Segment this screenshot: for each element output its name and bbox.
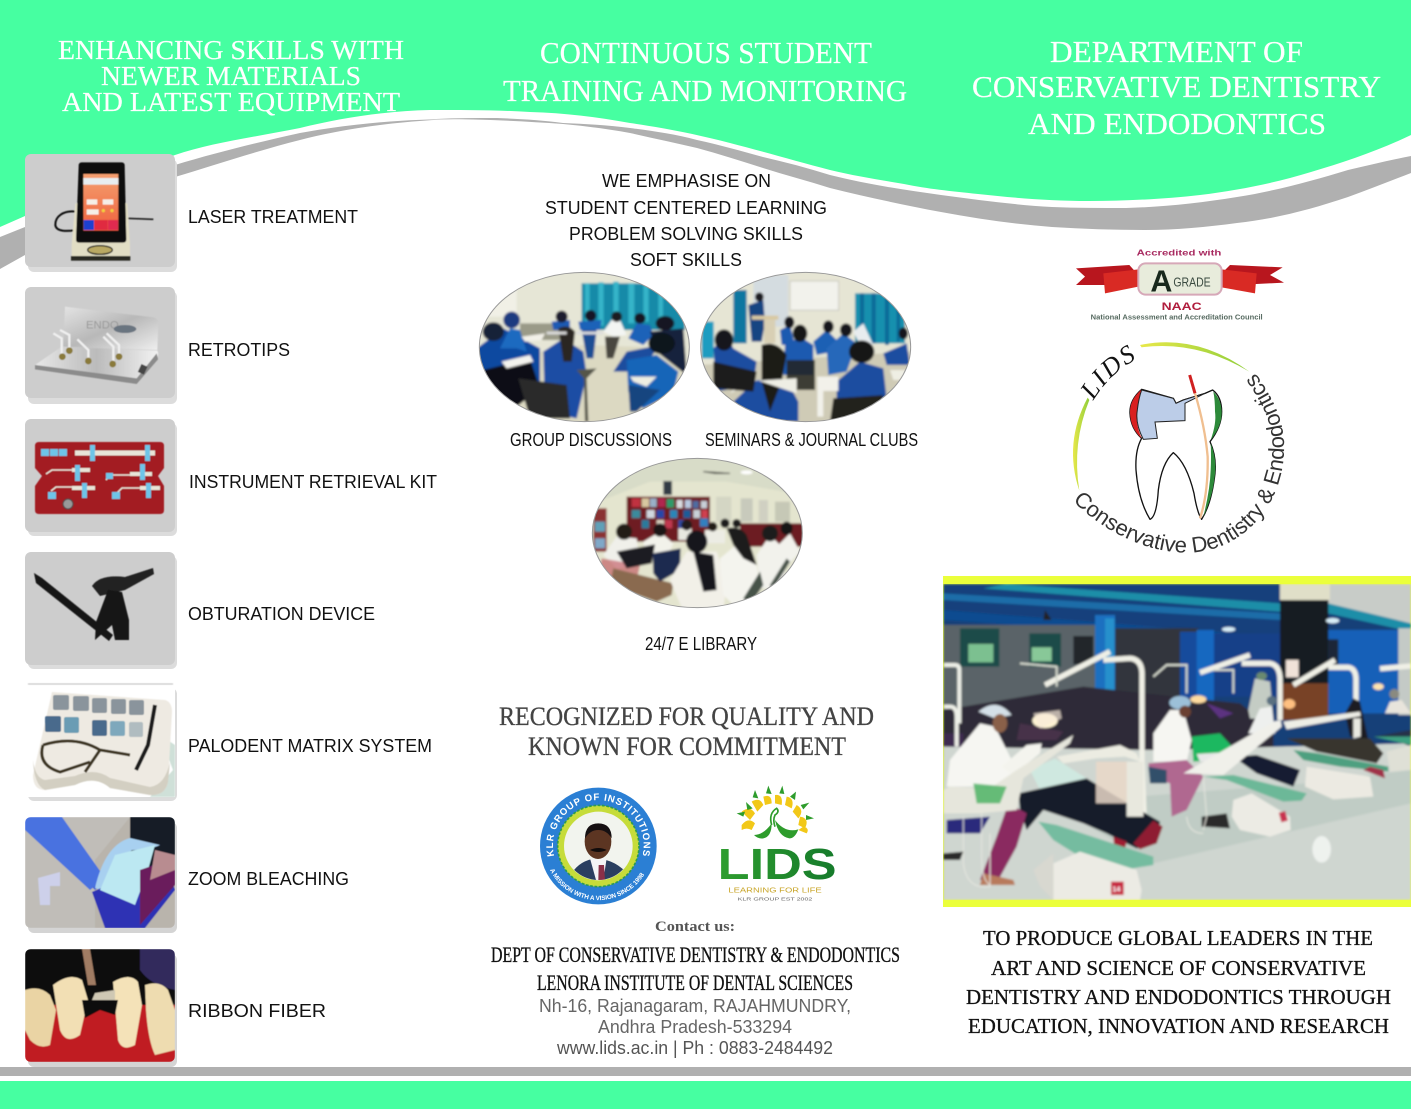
photo: dental clinic xyxy=(943,576,1411,907)
label: obturation device: OBTURATION DEVICE xyxy=(188,604,375,624)
label: zoom bleaching: ZOOM BLEACHING xyxy=(188,869,349,889)
heading: continuous student training xyxy=(503,35,907,108)
panel: contact details: Nh-16, Rajanagaram, RAJAHMUNDRY, xyxy=(539,996,851,1016)
panel: equipment list xyxy=(25,154,437,1067)
heading: enhancing skills: AND LATEST EQUIPMENT xyxy=(62,87,401,117)
heading: continuous student training: CONTINUOUS STUDENT xyxy=(540,35,872,70)
heading: department: AND ENDODONTICS xyxy=(1028,106,1326,141)
badge: naac a grade accreditation: Accredited with xyxy=(1137,247,1221,257)
caption: group discussions: GROUP DISCUSSIONS xyxy=(510,430,672,450)
mission statement: ART AND SCIENCE OF CONSERVATIVE xyxy=(991,956,1366,980)
panel: contact details xyxy=(491,919,900,1058)
heading: enhancing skills: ENHANCING SKILLS WITH xyxy=(58,35,404,65)
logo: lids learning for life: LIDS xyxy=(718,841,837,889)
caption: seminars and journal clubs: SEMINARS & JOURNAL CLUBS xyxy=(705,430,918,450)
badge: naac a grade accreditation: National Assessment and Accreditation Council xyxy=(1091,314,1263,321)
logo: lids conservative dentistry and endodontics tooth xyxy=(1073,342,1284,553)
logo: klr group of institutions: A MISSION WITH A VISION SINCE 1998 xyxy=(550,869,644,900)
label: ribbon fiber: RIBBON FIBER xyxy=(188,1001,326,1021)
text block: we emphasise on: STUDENT CENTERED LEARNING xyxy=(545,198,827,218)
item: retrotips xyxy=(25,287,177,404)
heading: recognized for quality xyxy=(499,702,874,761)
text block: we emphasise on: SOFT SKILLS xyxy=(630,250,742,270)
item: retrotips: ENDO xyxy=(86,319,119,331)
background wave: green header with grey swoosh xyxy=(0,0,1411,269)
badge: naac a grade accreditation xyxy=(1076,247,1284,321)
photo: seminars and journal clubs xyxy=(698,270,915,425)
logo: lids learning for life xyxy=(718,786,837,901)
panel: contact details: Contact us: xyxy=(655,919,735,935)
logo: klr group of institutions: KLR GROUP OF INSTITUTIONS xyxy=(546,793,650,856)
text block: we emphasise on: WE EMPHASISE ON xyxy=(602,171,771,191)
text: lids on arc xyxy=(1080,344,1134,401)
panel: contact details: DEPT OF CONSERVATIVE DENTISTRY & ENDODONTICS xyxy=(491,942,900,967)
mission statement: TO PRODUCE GLOBAL LEADERS IN THE xyxy=(983,926,1373,950)
mission statement: DENTISTRY AND ENDODONTICS THROUGH xyxy=(966,985,1391,1009)
badge: naac a grade accreditation: NAAC xyxy=(1162,301,1202,313)
logo: lids learning for life: KLR GROUP EST 2002 xyxy=(738,896,813,901)
badge: naac a grade accreditation: A xyxy=(1150,264,1172,298)
icon: logo arcs xyxy=(1073,342,1249,491)
logo: klr group of institutions xyxy=(540,788,657,904)
heading: recognized for quality: KNOWN FOR COMMITMENT xyxy=(528,732,846,761)
mission statement: EDUCATION, INNOVATION AND RESEARCH xyxy=(968,1014,1389,1038)
panel: contact details: www.lids.ac.in | Ph : 0883-2484492 xyxy=(556,1038,833,1058)
photo: group discussions xyxy=(477,270,693,425)
photo: e library xyxy=(590,457,807,612)
heading: department xyxy=(972,34,1381,141)
label: instrument retrieval kit: INSTRUMENT RETRIEVAL KIT xyxy=(189,472,437,492)
item: instrument retrieval kit xyxy=(25,419,177,536)
label: retrotips: RETROTIPS xyxy=(188,340,290,360)
heading: continuous student training: TRAINING AND MONITORING xyxy=(503,73,907,108)
icon: tooth xyxy=(1130,375,1222,519)
heading: department: DEPARTMENT OF xyxy=(1050,34,1303,69)
heading: enhancing skills xyxy=(58,35,404,117)
text: conservative dentistry and endodontics on arc: Conservative Dentistry & Endodontics xyxy=(1076,374,1284,553)
caption: 24/7 e library: 24/7 E LIBRARY xyxy=(645,634,757,654)
text: lids on arc: LIDS xyxy=(1080,344,1134,401)
logo: lids learning for life: LEARNING FOR LIFE xyxy=(728,888,822,895)
footer bars xyxy=(0,1067,1411,1109)
text block: we emphasise on: PROBLEM SOLVING SKILLS xyxy=(569,224,803,244)
heading: department: CONSERVATIVE DENTISTRY xyxy=(972,69,1381,104)
item: palodent matrix system xyxy=(26,684,177,801)
item: obturation device xyxy=(25,552,177,669)
badge: naac a grade accreditation: GRADE xyxy=(1173,276,1211,290)
mission statement xyxy=(966,926,1391,1038)
heading: recognized for quality: RECOGNIZED FOR QUALITY AND xyxy=(499,702,874,731)
item: zoom bleaching xyxy=(25,817,177,933)
label: laser treatment: LASER TREATMENT xyxy=(188,207,358,227)
panel: contact details: Andhra Pradesh-533294 xyxy=(598,1017,792,1037)
item: laser treatment xyxy=(25,154,177,272)
photo: dental clinic: 14 xyxy=(1112,885,1121,894)
heading: enhancing skills: NEWER MATERIALS xyxy=(101,61,361,91)
item: ribbon fiber xyxy=(25,949,177,1067)
text block: we emphasise on xyxy=(545,171,827,270)
label: palodent matrix system: PALODENT MATRIX SYSTEM xyxy=(188,736,432,756)
panel: contact details: LENORA INSTITUTE OF DENTAL SCIENCES xyxy=(537,970,853,995)
